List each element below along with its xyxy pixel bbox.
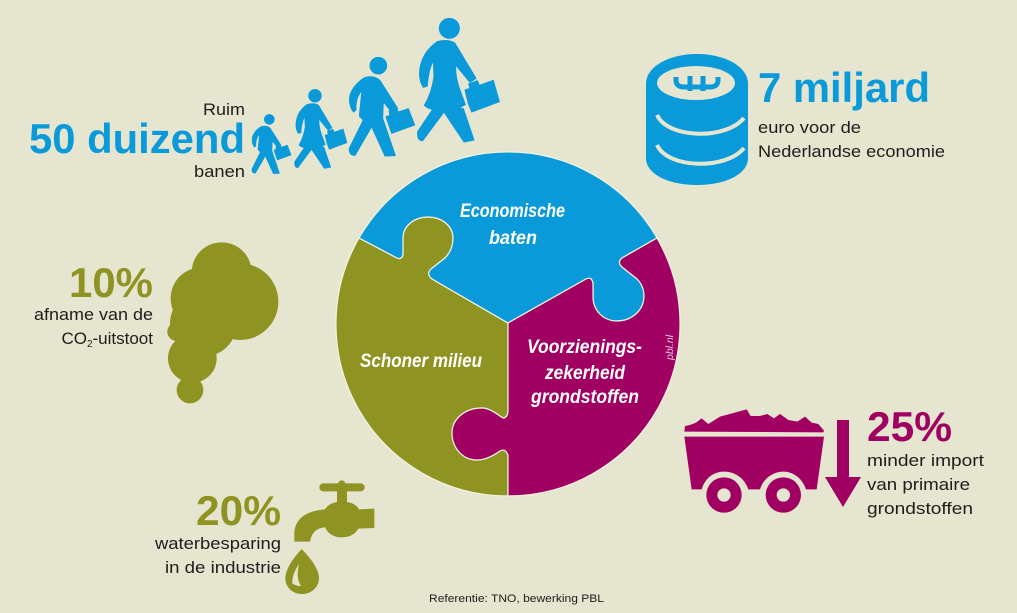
puzzle label: Voorzieningszekerheid grondstoffen: grondstoffen xyxy=(530,387,639,408)
text: CO2 statistic: CO xyxy=(61,329,87,348)
puzzle piece: magenta xyxy=(452,238,680,496)
puzzle label: Economische baten: Economische xyxy=(460,201,565,222)
puzzle label: Economische baten: baten xyxy=(489,228,537,249)
text: import statistic: minder import xyxy=(867,451,984,470)
puzzle label: Voorzieningszekerheid grondstoffen: Voorzienings- xyxy=(527,337,642,358)
puzzle label: Voorzieningszekerheid grondstoffen xyxy=(527,337,642,408)
icon: mine cart with ore xyxy=(684,409,824,513)
puzzle label: Economische baten xyxy=(460,201,565,249)
text: CO2 statistic: -uitstoot xyxy=(93,329,153,348)
puzzle circle xyxy=(336,152,680,496)
text: jobs statistic: banen xyxy=(194,162,245,181)
puzzle label: Schoner milieu: Schoner milieu xyxy=(360,351,482,372)
puzzle piece: blue xyxy=(359,152,657,323)
source reference: Referentie: TNO, bewerking PBL xyxy=(429,593,604,605)
text: CO2 statistic: afname van de xyxy=(34,305,153,324)
icon: walking people with briefcases xyxy=(252,18,499,174)
text: import statistic xyxy=(867,403,984,518)
text: water statistic: in de industrie xyxy=(165,558,281,577)
text: economy statistic: 7 miljard xyxy=(758,64,930,111)
text: water statistic: 20% xyxy=(196,487,281,534)
text: economy statistic: Nederlandse economie xyxy=(758,142,945,161)
puzzle piece: olive xyxy=(336,217,508,496)
text: water statistic xyxy=(154,487,281,577)
text: jobs statistic xyxy=(29,100,245,181)
text: jobs statistic: 50 duizend xyxy=(29,115,245,162)
icon: water tap with drop xyxy=(285,480,374,594)
text: jobs statistic: Ruim xyxy=(203,100,245,119)
icon: smoke cloud xyxy=(167,242,278,403)
text: import statistic: 25% xyxy=(867,403,952,450)
icon: stack of euro coins xyxy=(646,54,748,185)
icon: down arrow xyxy=(825,420,861,507)
puzzle label: Voorzieningszekerheid grondstoffen: zekerheid xyxy=(544,363,625,384)
pbl.nl credit: pbl.nl xyxy=(664,334,676,361)
text: CO2 statistic: 2 xyxy=(87,339,93,350)
text: import statistic: grondstoffen xyxy=(867,499,973,518)
text: economy statistic xyxy=(758,64,945,161)
text: CO2 statistic: 10% xyxy=(69,259,153,306)
text: import statistic: van primaire xyxy=(867,475,970,494)
text: water statistic: waterbesparing xyxy=(154,534,281,553)
text: CO2 statistic xyxy=(34,259,153,350)
text: economy statistic: euro voor de xyxy=(758,118,861,137)
